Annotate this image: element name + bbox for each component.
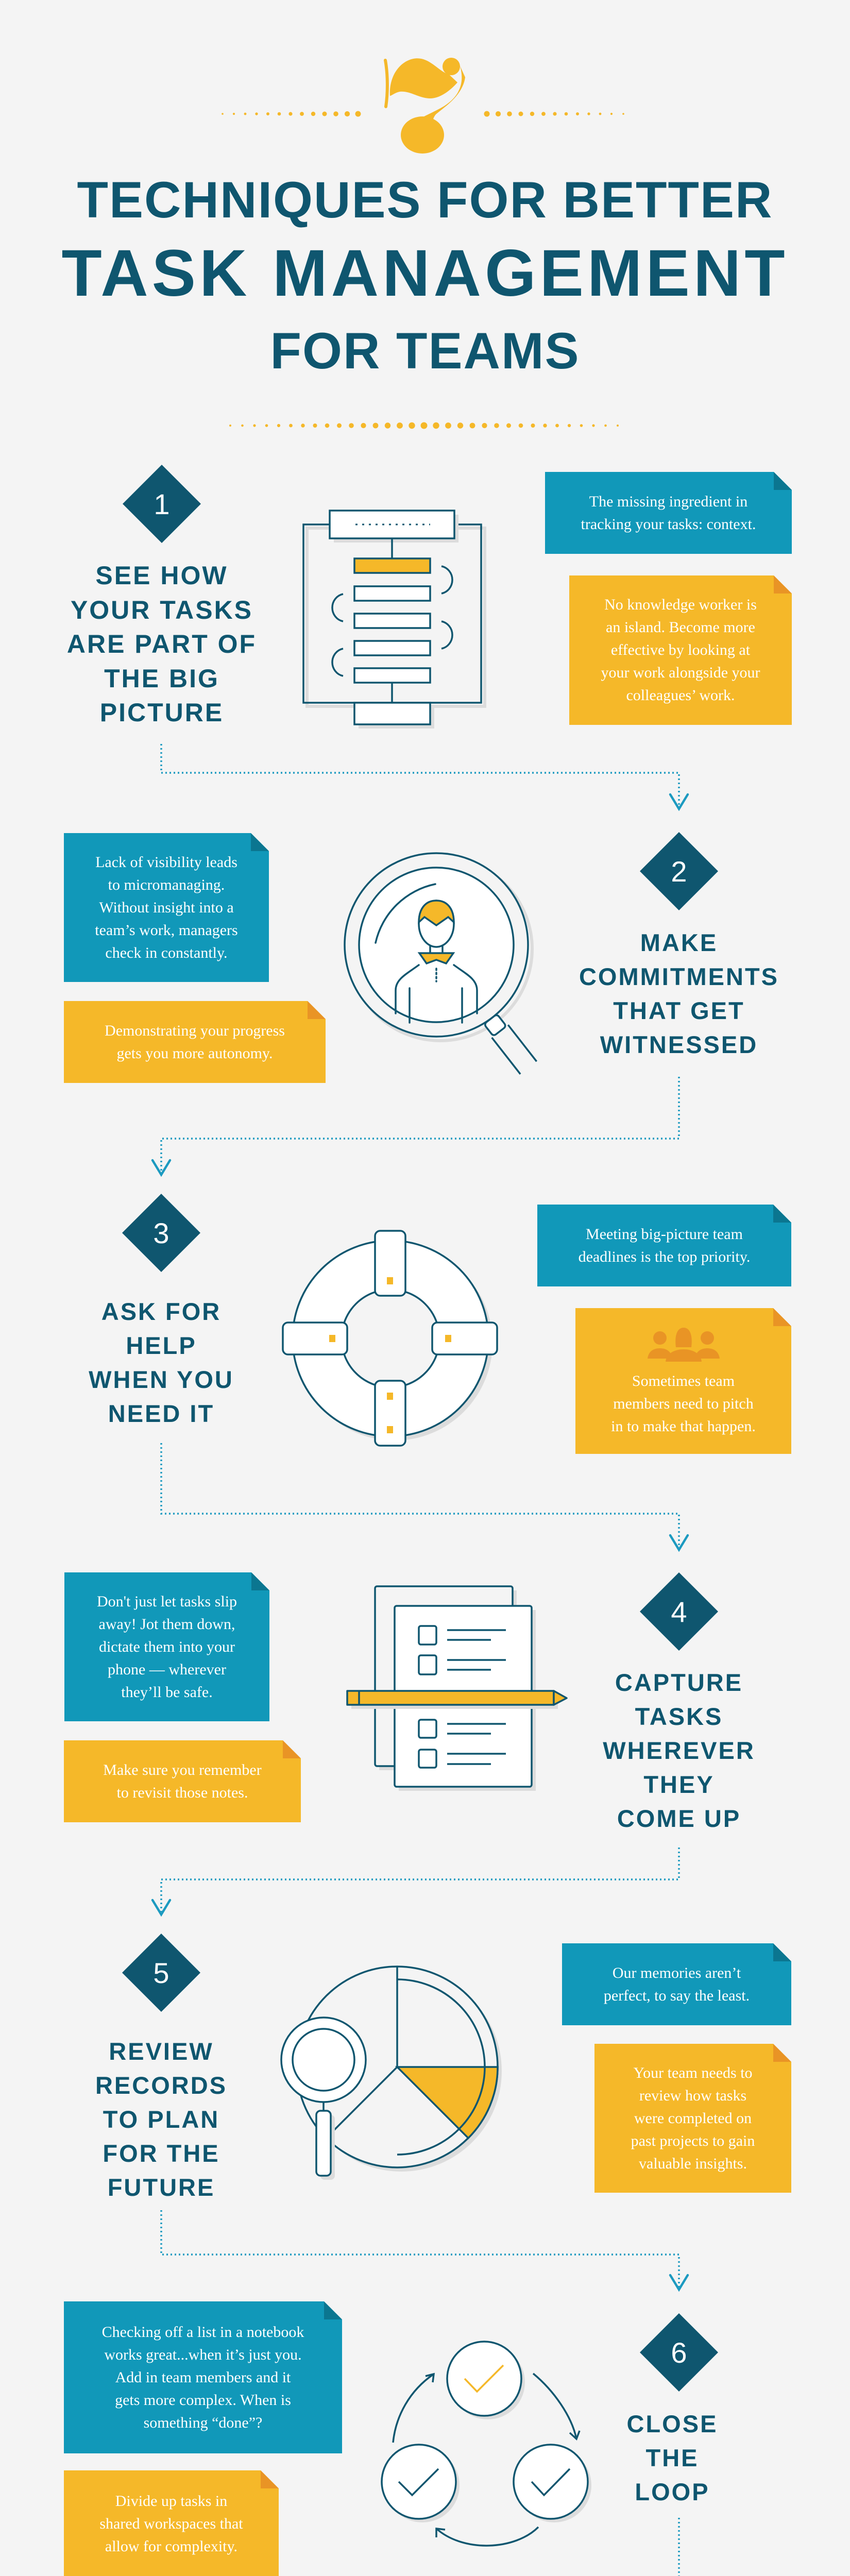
- callout: yellow 3: [575, 1308, 791, 1454]
- callout: blue 1: The missing ingredient in: [589, 493, 747, 510]
- icon: team people: [648, 1328, 720, 1362]
- heading 1: YOUR TASKS: [71, 596, 253, 624]
- heading 3: NEED IT: [108, 1400, 214, 1427]
- section 2: [64, 832, 779, 1083]
- heading 6: [627, 2410, 718, 2505]
- callout: blue 5: Our memories aren’t: [613, 1964, 741, 1981]
- badge 2: [640, 832, 718, 910]
- dots divider: top: [229, 422, 619, 429]
- heading 1: PICTURE: [100, 698, 224, 727]
- callout: blue 4: dictate them into your: [99, 1638, 235, 1655]
- callout: blue 6: Checking off a list in a notebook: [102, 2324, 304, 2340]
- callout: yellow 1: [569, 575, 792, 725]
- callout: blue 5: perfect, to say the least.: [604, 1987, 750, 2004]
- callout: yellow 2: gets you more autonomy.: [116, 1045, 273, 1061]
- heading 5: RECORDS: [95, 2072, 227, 2099]
- illustration: hierarchy chart: [302, 510, 486, 728]
- heading 3: ASK FOR: [101, 1298, 221, 1325]
- icon: decorative seven with flanking dots: [222, 58, 624, 154]
- heading 5: FOR THE: [103, 2140, 220, 2167]
- heading 3: HELP: [126, 1332, 197, 1359]
- callout: yellow 1: effective by looking at: [611, 641, 750, 658]
- callout: yellow 6: Divide up tasks in: [115, 2493, 227, 2509]
- callout: yellow 6: shared workspaces that: [99, 2515, 243, 2532]
- title: TASK MANAGEMENT: [62, 236, 788, 310]
- section 1: [67, 465, 792, 728]
- heading 2: [579, 929, 779, 1058]
- badge 6: [640, 2313, 718, 2392]
- heading 4: WHEREVER: [603, 1737, 755, 1764]
- heading 5: TO PLAN: [103, 2106, 219, 2133]
- callout: yellow 4: Make sure you remember: [103, 1761, 262, 1778]
- heading 3: WHEN YOU: [89, 1366, 234, 1393]
- badge 2: 2: [671, 855, 687, 888]
- callout: blue 2: Lack of visibility leads: [95, 853, 237, 871]
- badge 3: 3: [153, 1217, 169, 1249]
- heading 5: [95, 2038, 227, 2201]
- callout: blue 2: to micromanaging.: [108, 876, 225, 893]
- callout: blue 4: [64, 1572, 269, 1721]
- badge 6: 6: [671, 2336, 687, 2369]
- callout: blue 2: Without insight into a: [99, 899, 234, 916]
- badge 5: 5: [153, 1957, 169, 1989]
- section 5: [95, 1934, 791, 2201]
- callout: blue 2: team’s work, managers: [95, 921, 238, 939]
- callout: blue 3: [537, 1205, 791, 1286]
- callout: blue 4: phone — wherever: [108, 1661, 226, 1677]
- title: FOR TEAMS: [270, 322, 580, 379]
- callout: blue 5: [562, 1943, 791, 2025]
- callout: yellow 1: your work alongside your: [601, 664, 760, 681]
- callout: blue 6: something “done”?: [144, 2414, 262, 2431]
- callout: blue 3: Meeting big-picture team: [586, 1225, 743, 1243]
- heading 6: LOOP: [635, 2478, 710, 2505]
- callout: yellow 1: an island. Become more: [606, 619, 755, 636]
- callout: yellow 6: allow for complexity.: [105, 2538, 237, 2554]
- callout: blue 4: away! Jot them down,: [99, 1616, 235, 1632]
- callout: blue 4: Don't just let tasks slip: [97, 1593, 237, 1609]
- callout: yellow 3: members need to pitch: [613, 1395, 754, 1412]
- callout: yellow 3: Sometimes team: [632, 1372, 735, 1389]
- callout: blue 1: [545, 472, 792, 554]
- callout: yellow 5: Your team needs to: [633, 2064, 753, 2081]
- callout: yellow 2: Demonstrating your progress: [105, 1022, 285, 1039]
- callout: blue 3: deadlines is the top priority.: [579, 1248, 750, 1265]
- callout: yellow 5: [594, 2044, 791, 2193]
- callout: blue 6: works great...when it’s just you.: [104, 2346, 302, 2363]
- heading 2: THAT GET: [613, 997, 745, 1024]
- illustration: magnifier with person: [344, 852, 537, 1075]
- callout: yellow 3: in to make that happen.: [611, 1418, 756, 1435]
- badge 5: [122, 1934, 200, 2012]
- heading 1: [67, 561, 257, 727]
- badge 4: 4: [671, 1596, 687, 1628]
- badge 4: [640, 1572, 718, 1651]
- callout: yellow 4: to revisit those notes.: [116, 1784, 248, 1801]
- callout: blue 6: [64, 2301, 342, 2453]
- callout: yellow 6: [64, 2470, 279, 2576]
- callout: blue 6: gets more complex. When is: [115, 2392, 291, 2408]
- heading 2: WITNESSED: [600, 1031, 758, 1058]
- section 3: [89, 1194, 791, 1454]
- title: TECHNIQUES FOR BETTER: [77, 171, 773, 228]
- callout: yellow 5: valuable insights.: [639, 2155, 747, 2172]
- heading 3: [89, 1298, 234, 1427]
- title: [62, 171, 788, 379]
- heading 4: CAPTURE: [615, 1669, 743, 1696]
- heading 4: COME UP: [617, 1805, 741, 1832]
- badge 3: [122, 1194, 200, 1272]
- heading 6: THE: [646, 2444, 699, 2471]
- heading 2: MAKE: [640, 929, 718, 956]
- callout: yellow 5: were completed on: [634, 2109, 752, 2127]
- callout: blue 1: tracking your tasks: context.: [581, 515, 756, 533]
- heading 1: THE BIG: [104, 664, 219, 692]
- section 6: [64, 2301, 718, 2576]
- callout: yellow 5: past projects to gain: [631, 2132, 755, 2149]
- illustration: checklist with pencil: [346, 1585, 568, 1791]
- callout: yellow 5: review how tasks: [639, 2087, 746, 2104]
- callout: blue 4: they’ll be safe.: [121, 1684, 213, 1700]
- badge 1: [123, 465, 201, 543]
- callout: yellow 2: [64, 1001, 326, 1083]
- badge 1: 1: [154, 488, 170, 520]
- heading 5: FUTURE: [108, 2174, 215, 2201]
- heading 4: TASKS: [635, 1703, 723, 1730]
- heading 4: THEY: [643, 1771, 715, 1798]
- heading 1: ARE PART OF: [67, 630, 257, 658]
- heading 4: [603, 1669, 755, 1832]
- heading 6: CLOSE: [627, 2410, 718, 2437]
- heading 5: REVIEW: [109, 2038, 214, 2065]
- section 4: [64, 1572, 755, 1832]
- heading 2: COMMITMENTS: [579, 963, 779, 990]
- heading 1: SEE HOW: [95, 561, 228, 590]
- callout: yellow 1: No knowledge worker is: [604, 596, 757, 613]
- callout: blue 2: [64, 833, 269, 982]
- callout: yellow 1: colleagues’ work.: [626, 687, 735, 704]
- callout: yellow 4: [64, 1740, 301, 1822]
- illustration: life ring: [282, 1230, 498, 1447]
- callout: blue 2: check in constantly.: [105, 944, 228, 961]
- callout: blue 6: Add in team members and it: [115, 2369, 291, 2385]
